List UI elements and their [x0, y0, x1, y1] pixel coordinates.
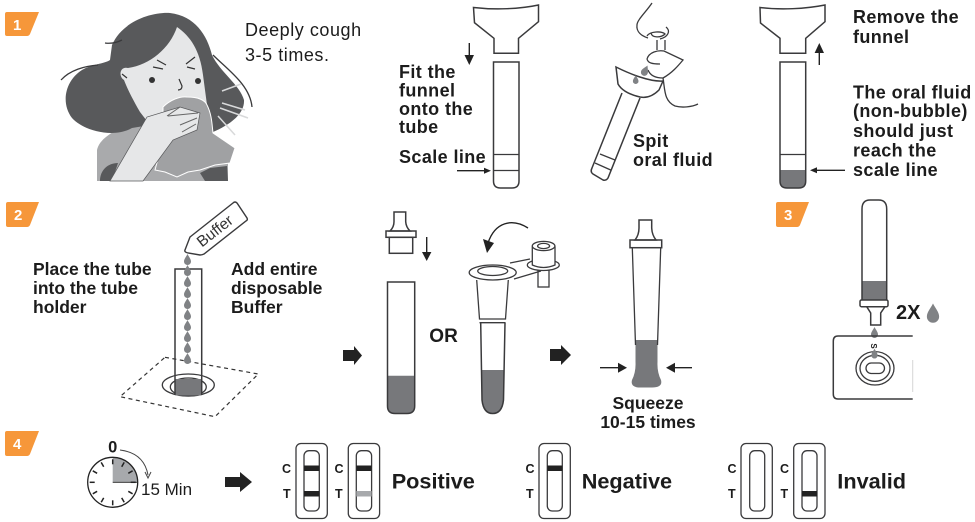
result: invalid strip 1	[728, 444, 772, 518]
badge: step 4: 4	[13, 436, 22, 453]
result: invalid strip 2: T	[780, 487, 788, 501]
arrow: to next stage	[343, 346, 362, 365]
text: deeply cough: 3-5 times.	[245, 45, 330, 65]
panel: step 4 read results	[5, 431, 906, 518]
result: invalid strip 2: C	[780, 462, 789, 476]
text: remove the funnel	[853, 7, 959, 47]
badge: step 3: 3	[784, 207, 792, 224]
text: add disposable buffer: Add entire	[231, 259, 318, 279]
text: squeeze 10-15 times	[600, 393, 696, 432]
icon: drop	[927, 304, 939, 323]
text: place tube in holder: Place the tube	[33, 259, 152, 279]
text: scale line: Scale line	[399, 147, 486, 167]
arrow: to squeeze stage	[550, 345, 571, 365]
badge: step 3	[776, 202, 809, 227]
text: fit the funnel: funnel	[399, 80, 455, 100]
result: invalid strip 1: T	[728, 487, 736, 501]
badge: step 1: 1	[13, 17, 21, 34]
label: positive: Positive	[392, 468, 475, 494]
result: invalid strip 2	[780, 444, 825, 518]
panel: step 2 add buffer	[6, 202, 696, 432]
text: fit the funnel: Fit the	[399, 62, 456, 82]
arrow: timer to results	[225, 472, 252, 492]
diagram: remove funnel	[760, 5, 845, 188]
result: negative strip: C	[526, 462, 535, 476]
diagram: fit funnel onto tube	[457, 5, 538, 188]
text: add disposable buffer: disposable	[231, 278, 323, 298]
text: place tube in holder: into the tube	[33, 278, 138, 298]
text: add disposable buffer: Buffer	[231, 297, 283, 317]
result: positive strip 1: C	[282, 462, 291, 476]
diagram: flip cap tube with liquid	[469, 223, 559, 414]
text: oral fluid should reach the scale line: scale line	[853, 160, 938, 180]
diagram: dropper over cassette well: S	[869, 343, 878, 349]
icon: timer 15 minutes	[88, 438, 192, 507]
text: oral fluid should reach the scale line: should just	[853, 121, 953, 141]
text: add disposable buffer	[231, 259, 323, 317]
diagram: dropper over cassette well	[833, 200, 913, 399]
badge: step 4	[5, 431, 39, 456]
result: positive strip 2: T	[335, 487, 343, 501]
result: positive strip 1	[282, 444, 327, 518]
illustration: woman coughing into tissue	[61, 13, 252, 181]
label: negative: Negative	[582, 468, 672, 494]
text: remove the funnel: funnel	[853, 27, 909, 47]
text: oral fluid should reach the scale line	[853, 82, 972, 180]
text: oral fluid should reach the scale line: reach the	[853, 140, 937, 160]
result: negative strip	[526, 444, 570, 518]
badge: step 1	[5, 12, 39, 36]
text: oral fluid should reach the scale line: (non-bubble)	[853, 101, 968, 121]
result: positive strip 1: T	[283, 487, 291, 501]
result: positive strip 2: C	[334, 462, 344, 476]
text: place tube in holder	[33, 259, 152, 317]
text: spit oral fluid: Spit	[633, 131, 669, 151]
panel: step 1 collect oral fluid	[5, 3, 972, 188]
text: or: OR	[429, 326, 458, 347]
diagram: buffer dropping into tube in holder	[120, 202, 258, 417]
badge: step 2	[6, 202, 39, 227]
text: squeeze 10-15 times: Squeeze	[612, 393, 684, 413]
text: spit oral fluid: oral fluid	[633, 150, 713, 170]
diagram: buffer dropping into tube in holder: Buffer	[194, 212, 237, 251]
badge: step 2: 2	[14, 207, 22, 224]
text: squeeze 10-15 times: 10-15 times	[600, 412, 696, 432]
label: invalid: Invalid	[837, 468, 906, 494]
text: fit the funnel: tube	[399, 117, 439, 137]
icon: timer 15 minutes: 0	[108, 438, 117, 456]
text: deeply cough	[245, 20, 362, 65]
diagram: cap and tube with liquid	[386, 212, 431, 414]
text: fit the funnel	[399, 62, 473, 137]
text: fit the funnel: onto the	[399, 99, 473, 119]
text: deeply cough: Deeply cough	[245, 20, 362, 40]
text: remove the funnel: Remove the	[853, 7, 959, 27]
text: place tube in holder: holder	[33, 297, 87, 317]
result: negative strip: T	[526, 487, 534, 501]
text: 2X: 2X	[896, 302, 921, 324]
result: invalid strip 1: C	[728, 462, 737, 476]
diagram: squeezing assembled tube	[600, 220, 692, 388]
illustration: spit oral fluid into funnel	[591, 3, 698, 180]
icon: timer 15 minutes: 15 Min	[141, 480, 192, 499]
result: positive strip 2	[334, 444, 380, 518]
panel: step 3 add drops to cassette	[776, 200, 939, 399]
text: spit oral fluid	[633, 131, 713, 170]
text: oral fluid should reach the scale line: The oral fluid	[853, 82, 972, 102]
